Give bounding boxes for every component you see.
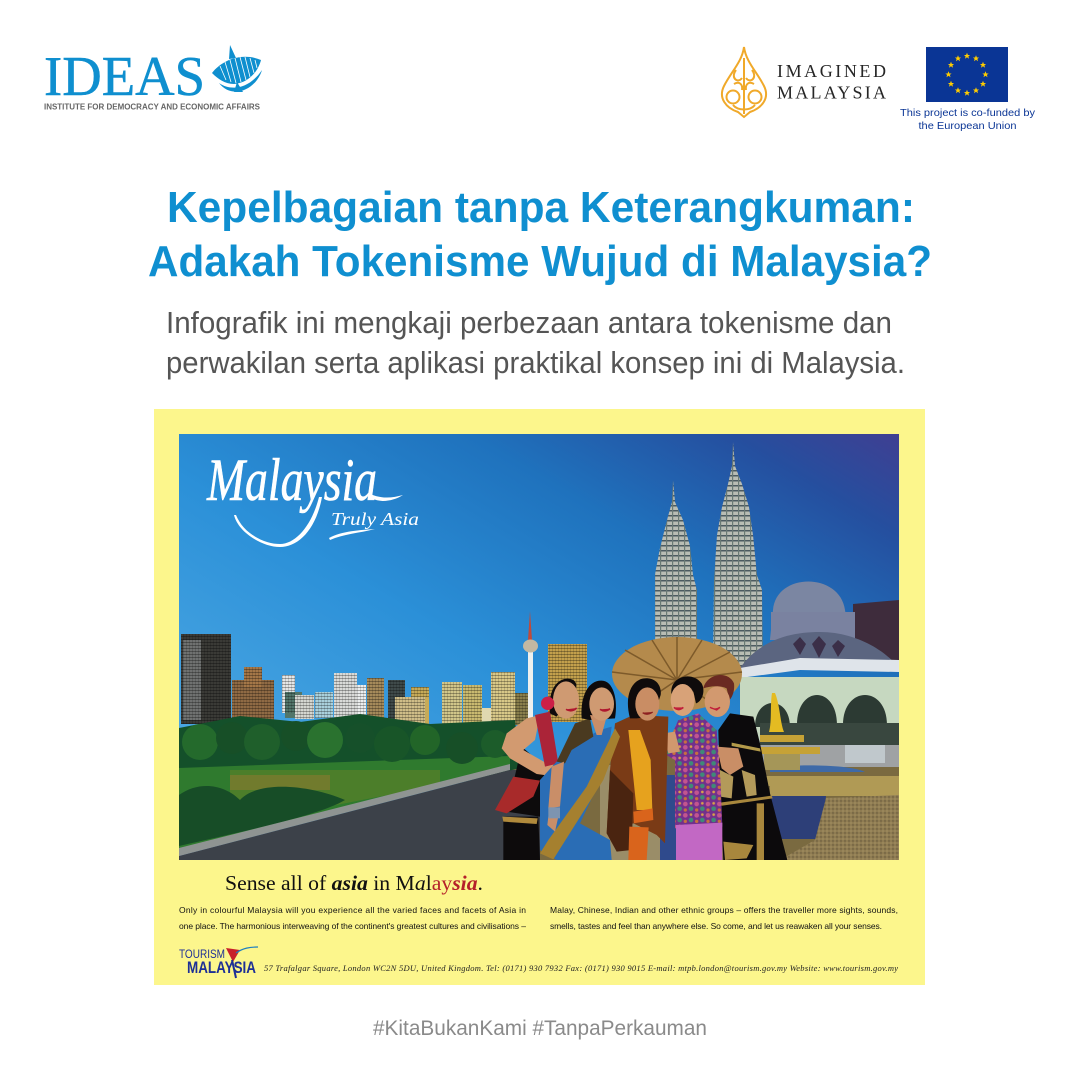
logo: European Union co-funding	[900, 47, 1036, 132]
text: co-funding line 2: the European Union	[918, 120, 1017, 132]
woman in blue sari	[540, 681, 620, 860]
ad body text: right column	[550, 905, 898, 931]
mosque	[740, 582, 900, 747]
icon: IDEAS bird	[212, 45, 262, 92]
parasol	[612, 637, 742, 711]
logo: Malaysia Truly Asia: Truly Asia	[331, 509, 419, 529]
ad body text: left column: one place. The harmonious interweaving of the continent's greatest cultures and civilisations –	[179, 921, 526, 931]
icon: EU flag	[926, 47, 1008, 102]
icon: gold wayang emblem	[722, 47, 766, 117]
ad body text: left column	[179, 905, 526, 931]
ad body text: right column: Malay, Chinese, Indian and other ethnic groups – offers the traveller more sights, sounds,	[550, 905, 898, 915]
hashtags: #KitaBukanKami #TanpaPerkauman	[373, 1017, 707, 1040]
woman in black dress	[703, 675, 787, 860]
logo: Tourism Malaysia: TOURISM	[179, 947, 225, 961]
five women in traditional dress	[495, 675, 787, 860]
city skyline	[181, 634, 587, 735]
title: Kepelbagaian tanpa Keterangkuman:	[167, 183, 915, 232]
logo: Imagined Malaysia	[722, 47, 886, 117]
text: Malaysia: MALAYSIA	[777, 82, 886, 102]
subtitle: Infografik ini mengkaji perbezaan antara tokenisme dan	[166, 305, 892, 340]
sky	[179, 434, 899, 860]
panel: Tourism Malaysia advertisement	[154, 409, 925, 985]
photo: Kuala Lumpur skyline with five women	[179, 434, 900, 860]
KL Tower	[523, 611, 538, 722]
paved plaza and fountain	[510, 693, 900, 860]
logo: Tourism Malaysia: MALAYSIA	[187, 958, 256, 977]
subtitle: perwakilan serta aplikasi praktikal konsep ini di Malaysia.	[166, 345, 905, 380]
title: Adakah Tokenisme Wujud di Malaysia?	[148, 237, 932, 286]
logo: IDEAS	[44, 45, 262, 112]
woman in purple floral kebaya	[663, 676, 722, 860]
woman in black with red sash	[495, 679, 579, 860]
logo: Malaysia Truly Asia: Malaysia	[206, 447, 377, 513]
greenery and road	[179, 714, 520, 860]
ad body text: left column: Only in colourful Malaysia will you experience all the varied faces and facets of Asia in	[179, 905, 526, 915]
subtitle	[166, 305, 905, 380]
logo: Tourism Malaysia	[179, 947, 258, 978]
text: Imagined: IMAGINED	[777, 61, 886, 81]
woman in orange and brown kebaya	[607, 678, 668, 860]
dark building behind mosque	[853, 600, 899, 660]
text: IDEAS full name: INSTITUTE FOR DEMOCRACY AND ECONOMIC AFFAIRS	[44, 102, 261, 112]
ad body text: right column: smells, tastes and feel than anywhere else. So come, and let us reawaken all your senses.	[550, 921, 882, 931]
ad address line: 57 Trafalgar Square, London WC2N 5DU, United Kingdom. Tel: (0171) 930 7932 Fax: (0171) 930 9015 E-mail: mtpb.london@tourism.gov.my Website: www.tourism.gov.my	[264, 963, 898, 973]
Petronas Twin Towers	[655, 442, 763, 668]
logo: Malaysia Truly Asia	[206, 458, 418, 547]
text: co-funding line 1: This project is co-funded by	[900, 107, 1036, 119]
ad headline: Sense all of asia in Malaysia.	[225, 871, 483, 895]
wordmark: IDEAS: IDEAS	[44, 46, 205, 108]
title	[148, 183, 932, 286]
